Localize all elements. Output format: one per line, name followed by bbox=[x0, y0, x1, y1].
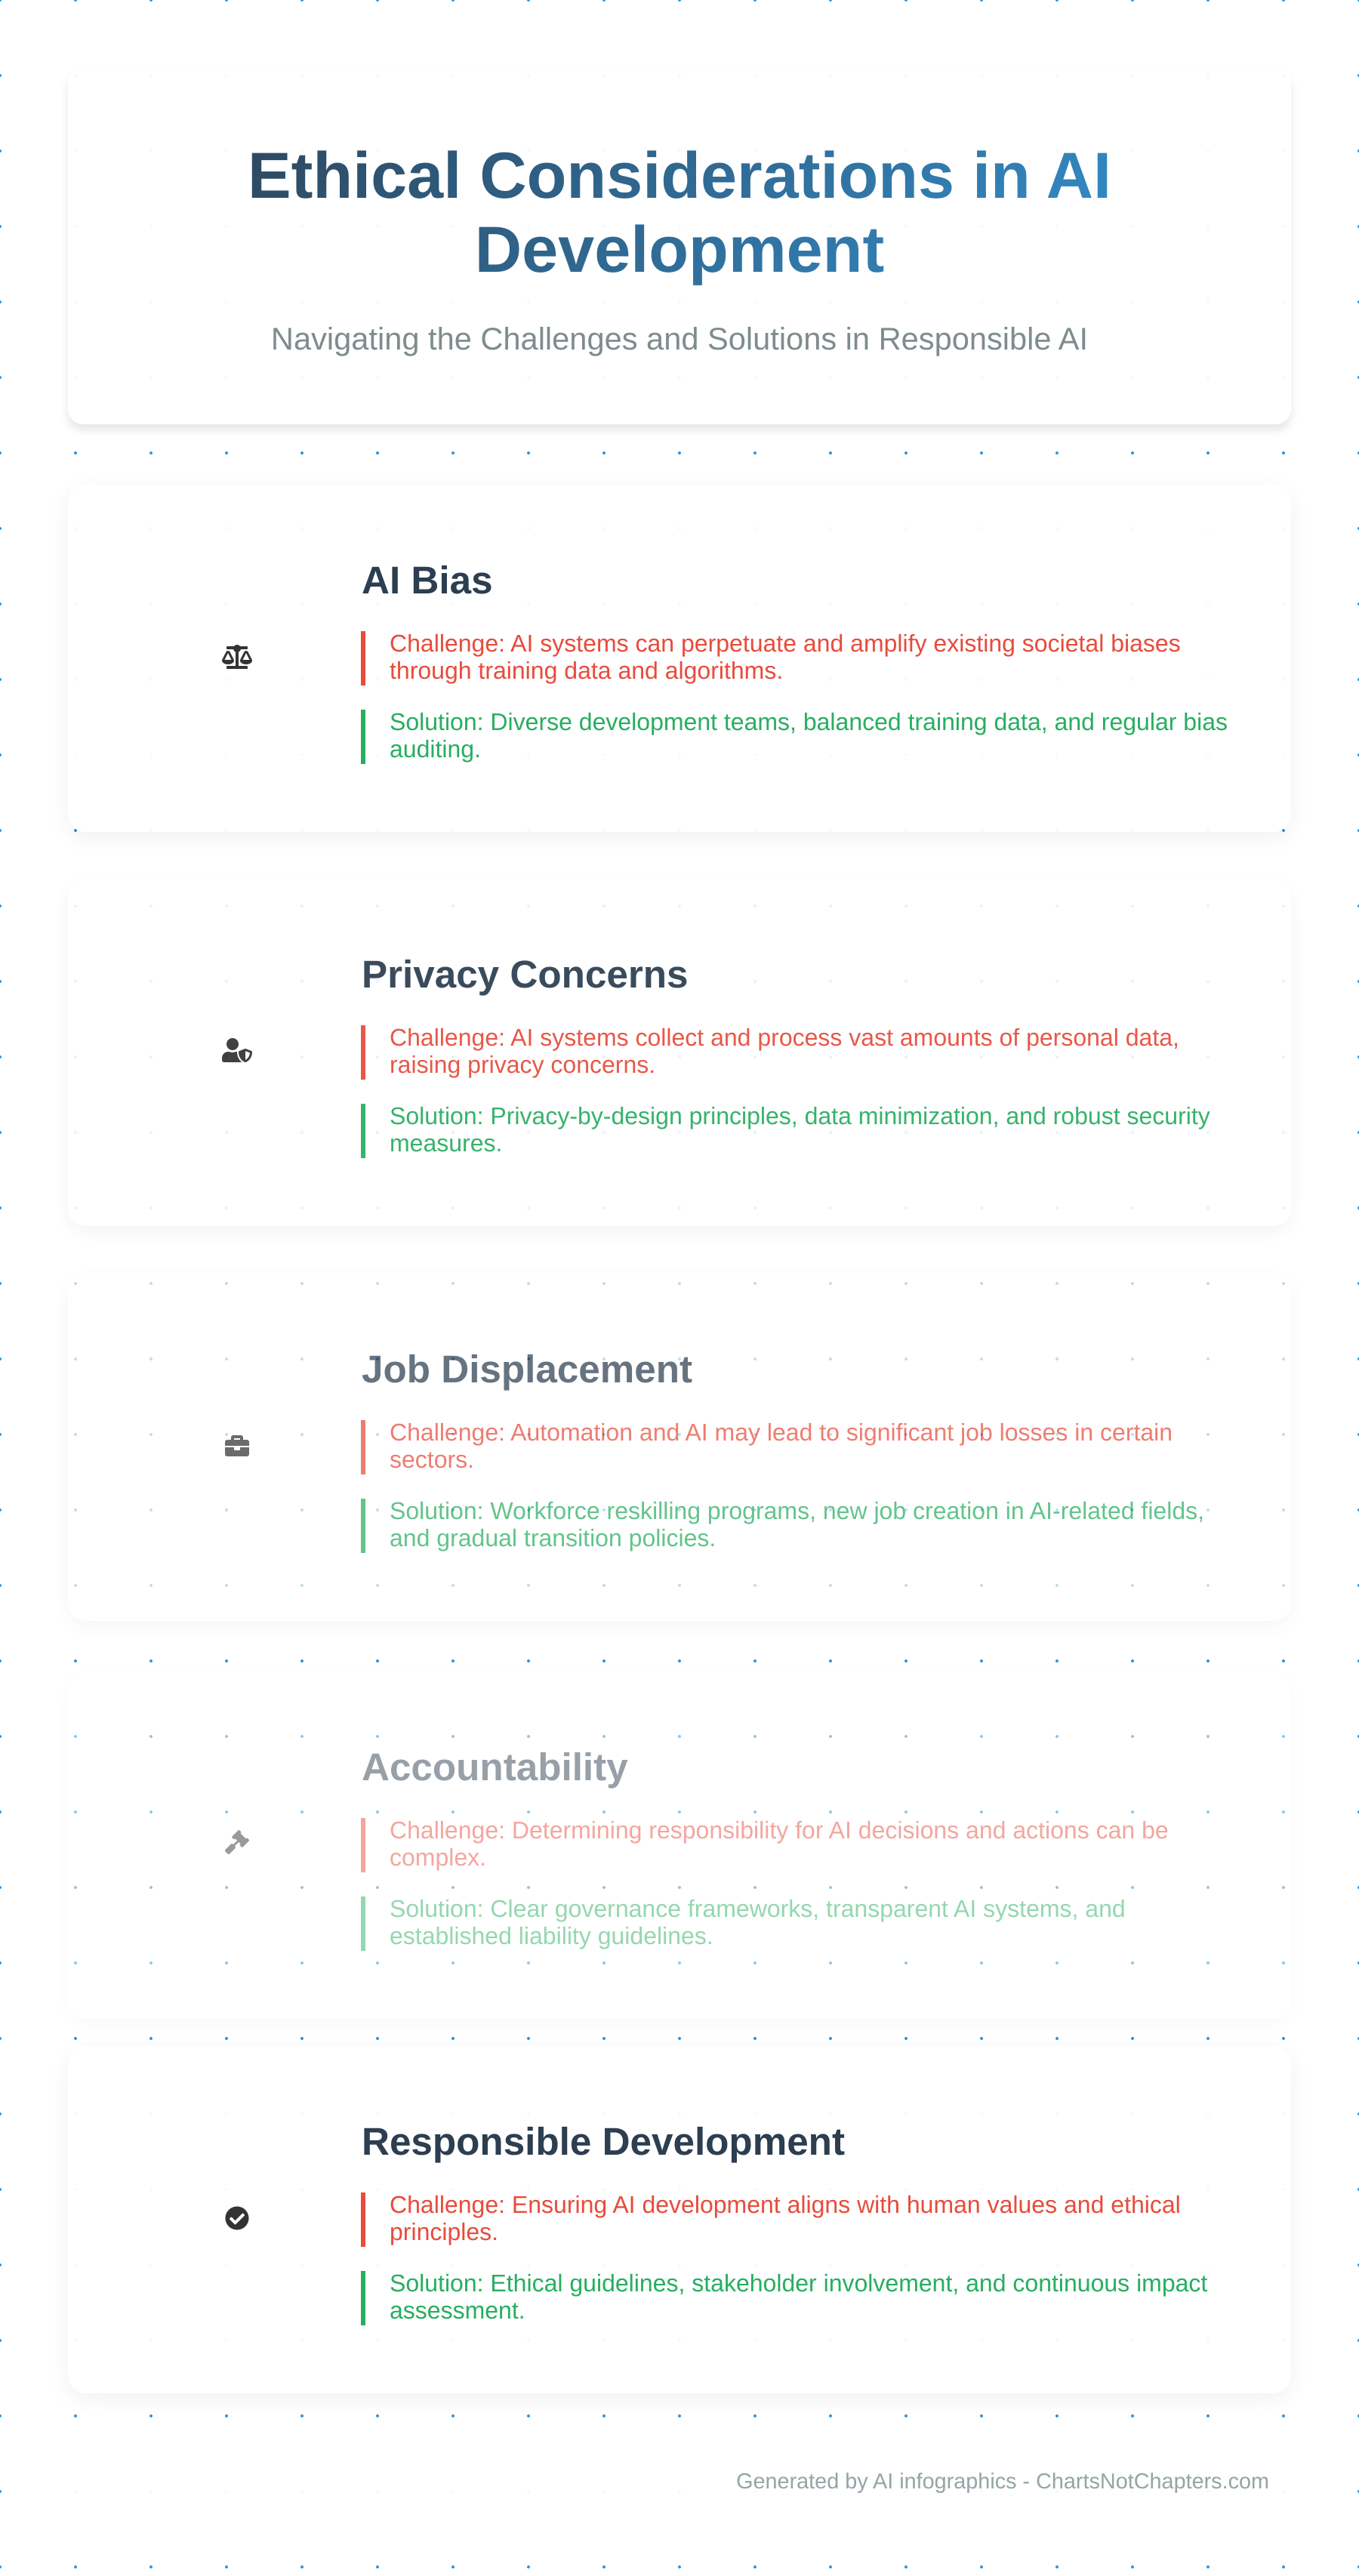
solution text bbox=[361, 1499, 1244, 1553]
solution text bbox=[361, 1104, 1244, 1158]
footer credit bbox=[68, 2440, 1291, 2523]
solution text: established liability guidelines. bbox=[390, 1922, 713, 1949]
title: Development bbox=[475, 214, 884, 286]
challenge text bbox=[361, 2192, 1244, 2247]
challenge text bbox=[361, 1420, 1244, 1474]
subtitle: Navigating the Challenges and Solutions in Responsible AI bbox=[271, 321, 1088, 356]
challenge text: through training data and algorithms. bbox=[390, 657, 783, 684]
heading: Job Displacement: Job Displacement bbox=[362, 1348, 692, 1391]
heading: Accountability: Accountability bbox=[362, 1746, 628, 1789]
title bbox=[98, 139, 1261, 287]
heading: Responsible Development: Responsible Development bbox=[362, 2120, 845, 2163]
panel: Responsible Development bbox=[68, 2046, 1291, 2393]
panel: Job Displacement bbox=[68, 1274, 1291, 1621]
icon: balance scale bbox=[222, 645, 252, 669]
solution text: assessment. bbox=[390, 2297, 525, 2324]
solution text bbox=[361, 710, 1244, 764]
solution text: Solution: Clear governance frameworks, transparent AI systems, and bbox=[390, 1895, 1126, 1922]
solution text: auditing. bbox=[390, 735, 481, 763]
challenge text: Challenge: Automation and AI may lead to significant job losses in certain bbox=[390, 1419, 1173, 1446]
solution text: and gradual transition policies. bbox=[390, 1524, 716, 1551]
heading: AI Bias: AI Bias bbox=[362, 559, 493, 602]
icon: check circle bbox=[225, 2206, 249, 2230]
solution text: Solution: Diverse development teams, balanced training data, and regular bias bbox=[390, 708, 1228, 735]
icon: gavel bbox=[225, 1830, 249, 1854]
challenge text: Challenge: Ensuring AI development aligns with human values and ethical bbox=[390, 2191, 1181, 2218]
challenge text: principles. bbox=[390, 2218, 498, 2245]
challenge text bbox=[361, 1025, 1244, 1080]
panel: Accountability bbox=[68, 1672, 1291, 2019]
icon: user shield bbox=[222, 1038, 252, 1062]
challenge text: Challenge: AI systems collect and process vast amounts of personal data, bbox=[390, 1024, 1179, 1051]
solution text bbox=[361, 2271, 1244, 2325]
challenge text: sectors. bbox=[390, 1446, 474, 1473]
panel: Privacy Concerns bbox=[68, 879, 1291, 1226]
challenge text: Challenge: Determining responsibility for AI decisions and actions can be bbox=[390, 1816, 1169, 1844]
heading: Privacy Concerns: Privacy Concerns bbox=[362, 953, 688, 996]
challenge text: complex. bbox=[390, 1844, 486, 1871]
solution text bbox=[361, 1897, 1244, 1951]
challenge text: Challenge: AI systems can perpetuate and amplify existing societal biases bbox=[390, 630, 1181, 657]
header panel bbox=[68, 68, 1291, 424]
challenge text bbox=[361, 1818, 1244, 1872]
panel: AI Bias bbox=[68, 485, 1291, 832]
solution text: Solution: Ethical guidelines, stakeholder involvement, and continuous impact bbox=[390, 2269, 1207, 2297]
solution text: Solution: Privacy-by-design principles, data minimization, and robust security bbox=[390, 1102, 1210, 1129]
challenge text: raising privacy concerns. bbox=[390, 1051, 655, 1078]
solution text: measures. bbox=[390, 1129, 502, 1157]
footer credit: Generated by AI infographics - ChartsNotChapters.com bbox=[736, 2470, 1269, 2494]
title: Ethical Considerations in AI bbox=[248, 140, 1111, 212]
solution text: Solution: Workforce reskilling programs, new job creation in AI-related fields, bbox=[390, 1497, 1204, 1524]
icon: briefcase bbox=[225, 1435, 249, 1456]
challenge text bbox=[361, 631, 1244, 686]
